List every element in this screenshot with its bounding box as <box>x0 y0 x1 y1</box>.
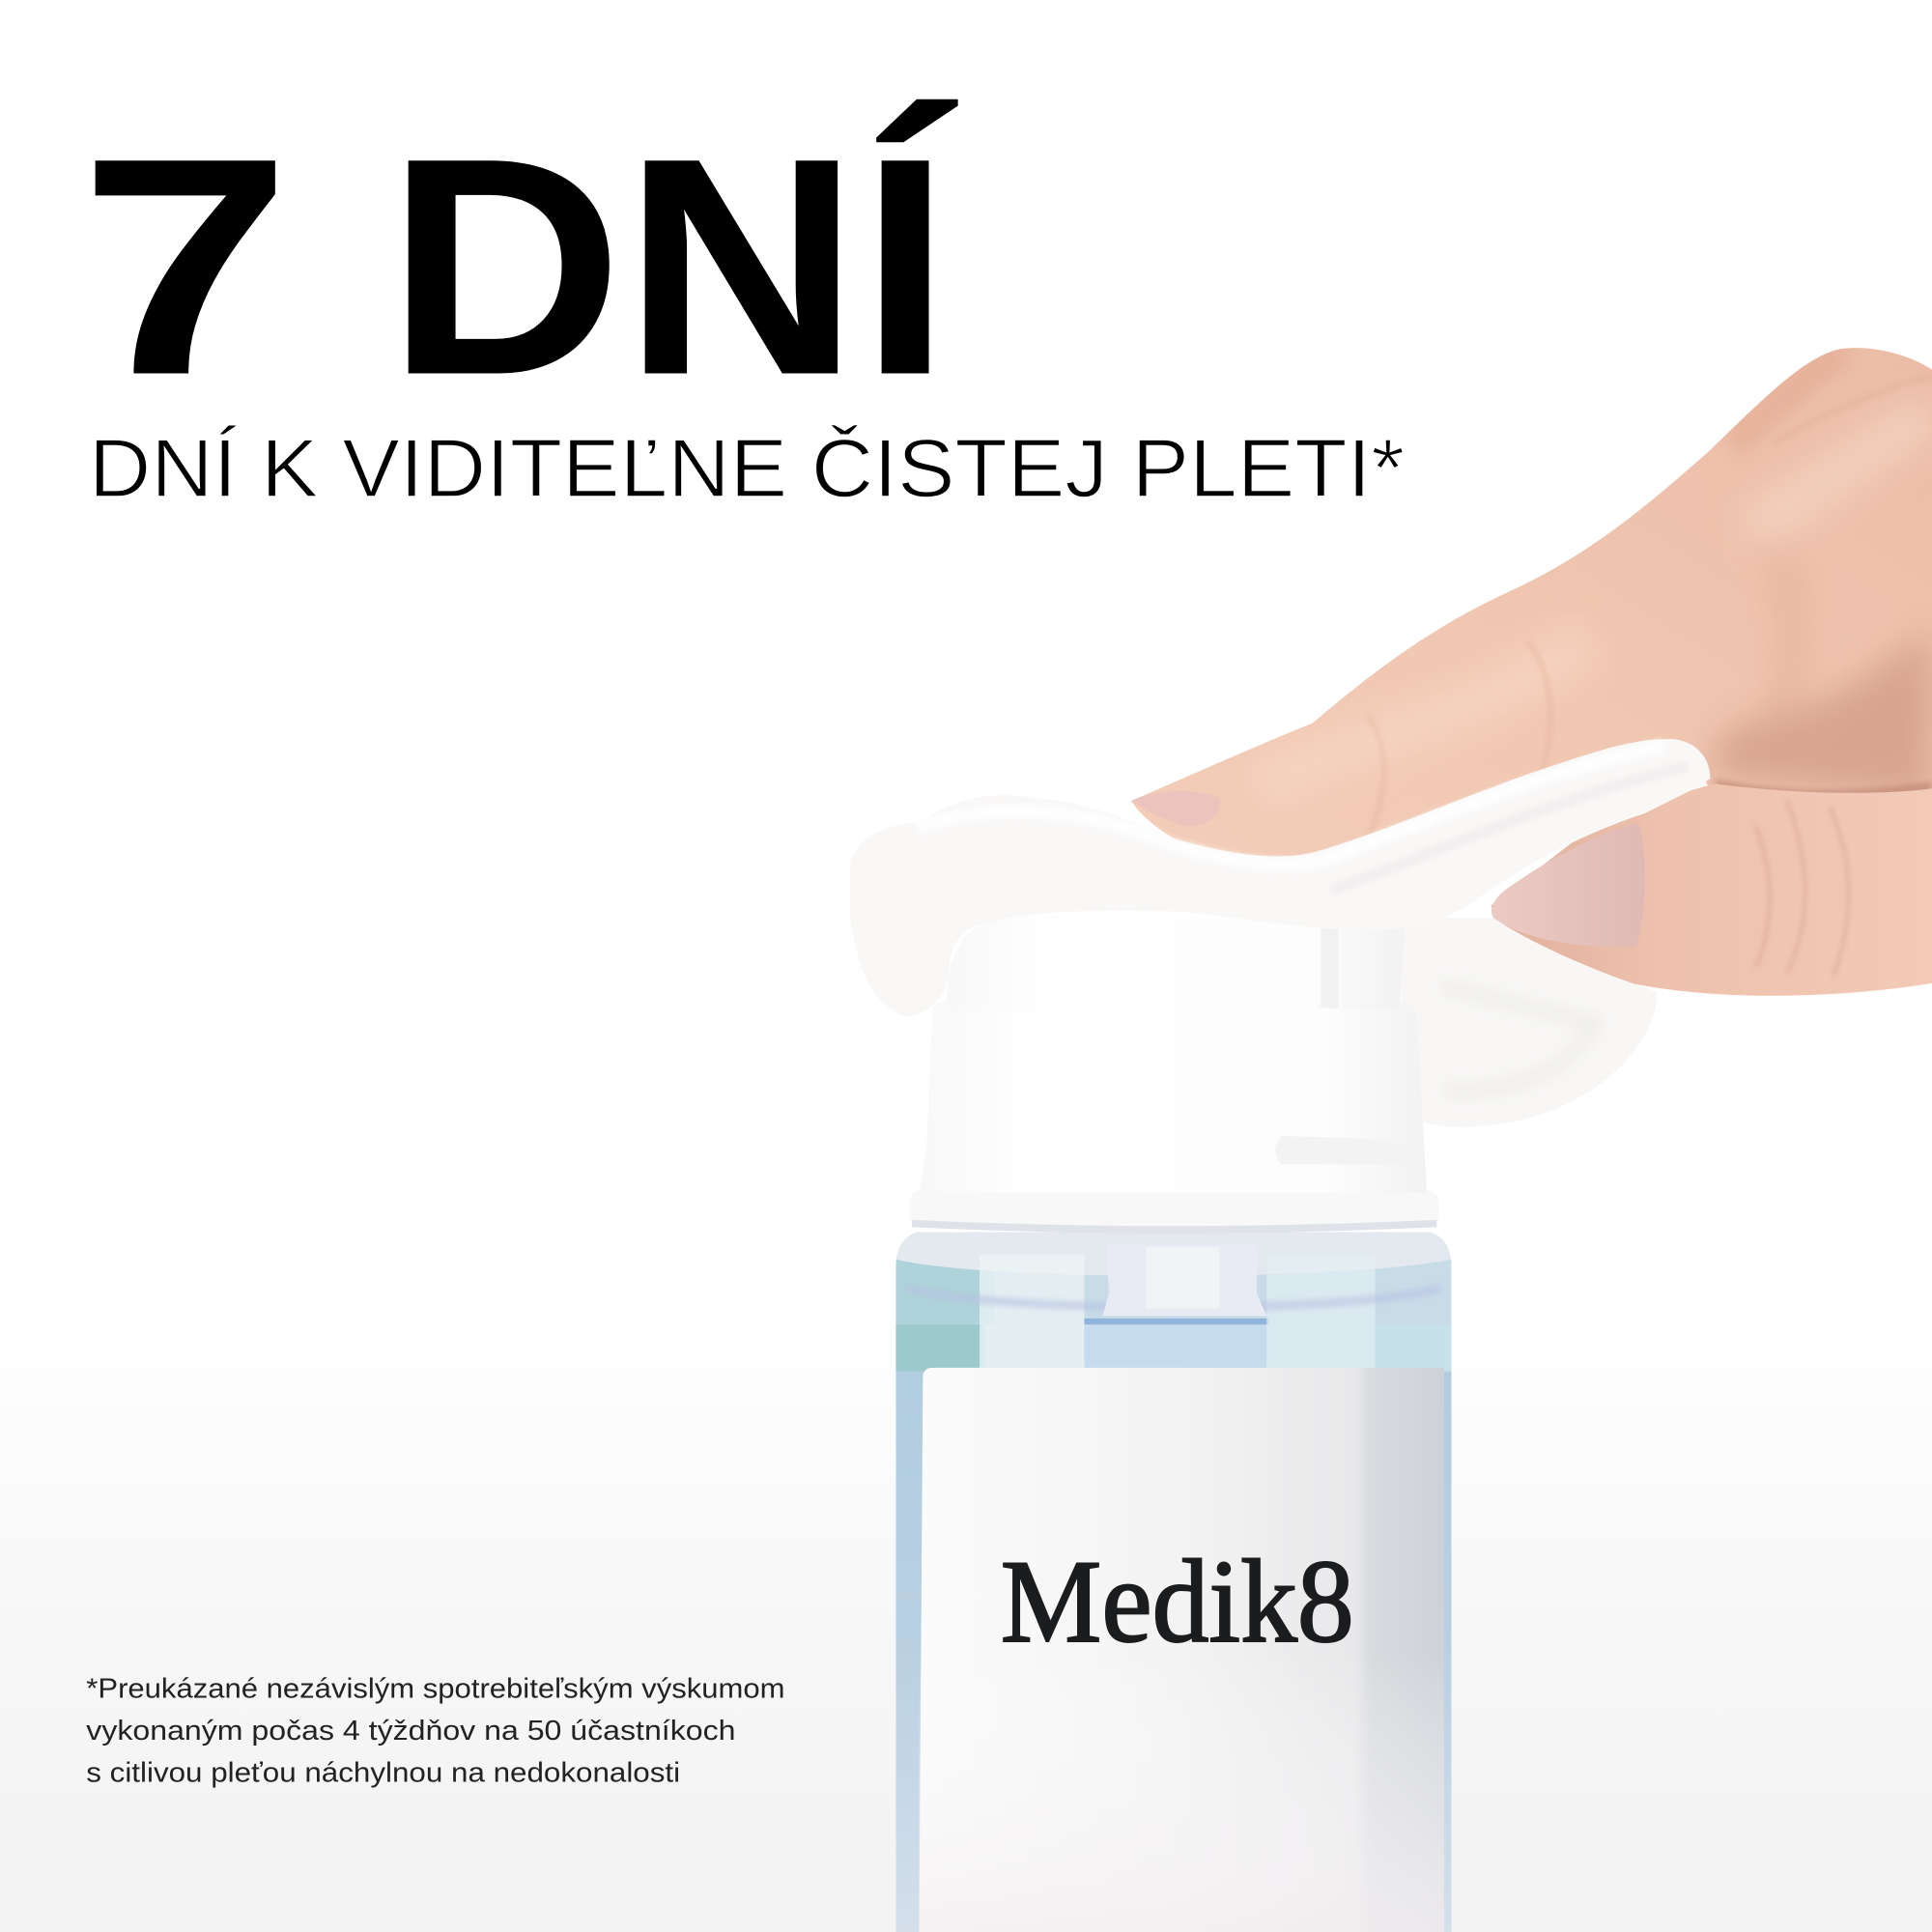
bottle: cap tab <box>1275 1136 1417 1164</box>
subtitle: DNÍ K VIDITEĽNE ČISTEJ PLETI* <box>89 423 1405 515</box>
hand: shading <box>1257 349 1932 838</box>
hand: index fingernail <box>1131 791 1220 826</box>
bottle: lower cap <box>920 1001 1427 1193</box>
hand holding cotton pad <box>1131 348 1932 996</box>
footnote: vykonaným počas 4 týždňov na 50 účastníkoch <box>86 1716 735 1747</box>
hand: thumbnail <box>1492 823 1645 947</box>
hand: thumb <box>1491 783 1932 996</box>
title: 7 DNÍ: DNÍ <box>386 93 962 439</box>
cotton pad: rear disc <box>1392 918 1658 1127</box>
footnote <box>86 1674 785 1788</box>
title: 7 DNÍ <box>79 93 962 439</box>
cotton pad: fold shading <box>1331 766 1688 890</box>
footnote: *Preukázané nezávislým spotrebiteľským výskumom <box>86 1674 784 1705</box>
hand: index finger and back of hand <box>1131 348 1932 863</box>
bottle: logo: Medik8 <box>1001 1537 1354 1667</box>
bottle: collar ring <box>909 1190 1439 1227</box>
hand: thumb creases <box>1756 801 1849 976</box>
bottle <box>895 914 1452 1932</box>
cotton pad: soft top edge <box>918 746 1663 865</box>
bottle: transparent shoulder <box>895 1226 1452 1932</box>
bottle: inner pump stem <box>1103 1244 1266 1316</box>
cotton pad: front layer <box>850 739 1710 1016</box>
hand: crease above thumb <box>1716 779 1932 801</box>
bottle: upper cap <box>947 914 1405 1010</box>
bottle: label <box>920 1368 1444 1932</box>
title: 7 DNÍ: 7 <box>79 93 292 439</box>
footnote: s citlivou pleťou náchylnou na nedokonalosti <box>86 1757 680 1788</box>
